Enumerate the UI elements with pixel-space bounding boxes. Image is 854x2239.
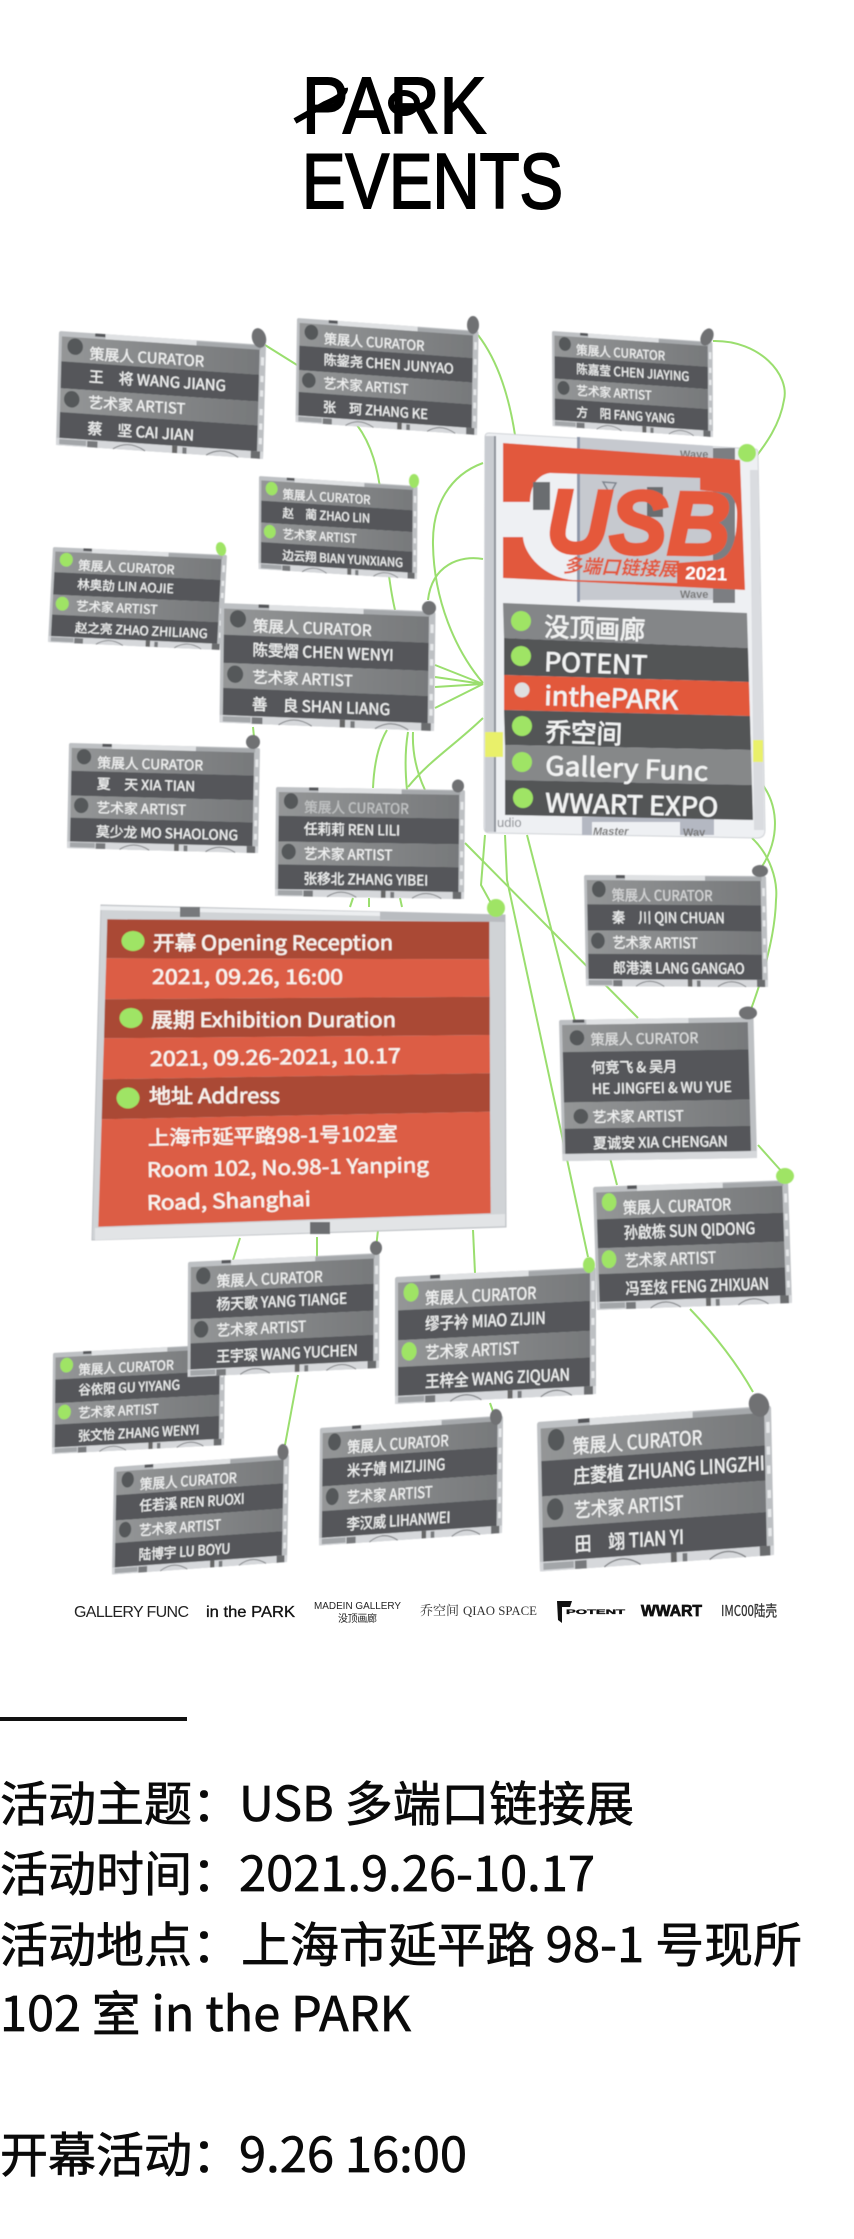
venue list [503,603,753,825]
panel: Zhao Lin / Bian Yunxiang [259,474,419,579]
artist block [73,796,239,844]
panel: Mizijing / Lihanwei [319,1409,503,1545]
curator block: 策展人 CURATOR [576,341,665,365]
opening reception: 开幕 Opening Reception [153,927,393,956]
panel: Chen Wenyi / Shan Liang [220,601,436,731]
curator block: 缪子衿 MIAO ZIJIN [425,1306,546,1335]
artist block [194,1313,358,1368]
address: Road, Shanghai [146,1183,311,1216]
curator block [284,793,409,841]
panel: Gu Yiyang / Zhang Wenyi [52,1344,225,1454]
panel: USB exhibition main panel [484,433,765,839]
artist block: 艺术家 ARTIST [624,1245,716,1272]
connector lines [233,335,785,1445]
divider rule [0,1717,187,1721]
artist block [63,390,195,446]
curator block [66,338,227,396]
panel: USB exhibition main panel: Wave [680,449,708,461]
artist block: 王梓全 WANG ZIQUAN [425,1362,570,1393]
logo: in the PARK: in the PARK [206,1604,295,1621]
year: 2021 [685,563,728,584]
curator block: 任若溪 REN RUOXI [139,1487,245,1515]
address: Room 102, No.98-1 Yanping [147,1149,429,1183]
handle [738,444,756,462]
artist block: 艺术家 ARTIST [576,381,652,404]
artist block [54,596,209,642]
logo: Potent: POTENT [566,1610,626,1616]
artist block [325,1479,451,1537]
logo: WWART: WWART [641,1603,702,1620]
curator block: 策展人 CURATOR [324,328,425,355]
handle [776,1168,794,1184]
line: time: 2021.9.26-10.17 [239,1835,595,1905]
USB wordmark: USB [546,472,731,575]
line: location: 上海市延平路 98-1 号现所 [241,1906,802,1976]
curator block: 秦 川 QIN CHUAN [612,906,725,927]
curator block [196,1261,347,1316]
artist block: 张 珂 ZHANG KE [323,396,428,423]
logo: IMCOO: IMC00陆壳 [721,1600,777,1621]
curator block: 策展人 CURATOR [78,556,175,578]
handle [250,327,268,349]
address [116,1080,429,1216]
artist block [302,371,428,423]
artist block: 夏诚安 XIA CHENGAN [593,1130,728,1154]
curator block [569,1026,732,1099]
artist block: 艺术家 ARTIST [216,1315,307,1341]
panel: USB exhibition main panel: Wave [680,589,708,601]
artist block: 艺术家 ARTIST [282,525,357,547]
artist block: 田 翊 TIAN YI [574,1522,684,1558]
logo: Qiao Space: QIAO SPACE [463,1603,537,1618]
panel: USB exhibition main panel: udio [497,815,522,830]
handle [467,316,479,334]
handle [739,1006,757,1020]
curator block: 策展人 CURATOR [283,485,371,508]
USB logo: red block with plug cutout [503,443,745,590]
handle [409,474,419,488]
handle [278,1444,288,1460]
subtitle: 多端口链接展 [563,551,680,582]
logo: Qiao Space: 乔空间 [420,1600,459,1619]
panel: Zhuang Lingzhi / Tian Yi [537,1390,774,1571]
panel: USB exhibition main panel: Wav [683,827,706,839]
artist block [547,1488,685,1560]
curator block [548,1414,765,1492]
curator block [229,610,394,666]
address: 地址 Address [149,1080,280,1109]
curator block [76,749,204,795]
title: EVENTS: EVENTS [302,137,563,225]
curator block: 策展人 CURATOR [611,884,713,905]
logo: Madein Gallery: MADEIN GALLERY [314,1601,401,1612]
curator block [404,1276,546,1336]
line: location [0,1906,802,1976]
line: time [0,1835,595,1905]
sponsor logos row [74,1600,777,1625]
curator block: 策展人 CURATOR [425,1281,536,1310]
handle [487,899,505,917]
title: PARK logo: PARK [302,61,486,150]
curator block: 王 将 WANG JIANG [89,366,226,396]
artist block: 艺术家 ARTIST [88,392,186,419]
curator block: 策展人 CURATOR [217,1265,323,1292]
venue: inthePARK: inthePARK [544,676,679,718]
venue: Potent: POTENT [544,642,648,683]
curator block: 陈雯熠 CHEN WENYI [252,638,394,666]
exhibition duration [120,1004,401,1072]
artist block [557,380,675,427]
curator block [121,1463,245,1517]
artist block [591,931,745,978]
panel: Yang Tiange / Wang Yuchen [188,1241,382,1377]
artist block: 艺术家 ARTIST [76,596,159,618]
panel: Qin Chuan / Lang Gangao [584,865,768,987]
artist block: 艺术家 ARTIST [612,931,698,952]
address: 上海市延平路98-1号102室 [148,1118,398,1151]
curator block: 策展人 CURATOR [253,614,372,641]
line: opening: 9.26 16:00 [239,2116,467,2186]
artist block: 艺术家 ARTIST [347,1480,433,1508]
artist block: 张文怡 ZHANG WENYI [78,1419,199,1445]
curator block: 米子婧 MIZIJING [347,1452,445,1482]
logo: Gallery Func: GALLERY FUNC [74,1604,189,1621]
curator block [60,1352,180,1400]
artist block: 善 良 SHAN LIANG [252,693,390,720]
panel: exhibition information [92,899,506,1240]
curator block: 策展人 CURATOR [97,752,204,774]
artist block: 边云翔 BIAN YUNXIANG [282,546,403,571]
artist block: 莫少龙 MO SHAOLONG [96,820,238,844]
line: theme: 活动主题： [0,1765,240,1835]
curator block [58,553,175,597]
panel: He Jingfei & Wu Yue / Xia Chengan [559,1006,757,1161]
venue: Madein Gallery: 没顶画廊 [544,607,646,648]
artist block: 李汉威 LIHANWEI [347,1505,451,1535]
artist block [573,1104,728,1154]
curator block: 谷依阳 GU YIYANG [78,1374,180,1399]
curator block: 赵 蔺 ZHAO LIN [283,504,370,527]
logo: Madein Gallery: 没顶画廊 [338,1610,377,1625]
panel: Lin Aojie / Zhao Zhiliang [48,541,228,650]
exhibition duration: 2021, 09.26-2021, 10.17 [150,1040,401,1072]
curator block: 任莉莉 REN LILI [304,819,400,841]
handle [452,780,464,792]
opening reception: 2021, 09.26, 16:00 [152,961,343,990]
handle [745,1390,773,1420]
opening reception [122,927,393,990]
artist block: 艺术家 ARTIST [252,665,353,691]
curator block: 策展人 CURATOR [304,797,409,819]
curator block: 夏 天 XIA TIAN [97,773,195,795]
handle [752,865,768,877]
curator block: 策展人 CURATOR [572,1423,703,1460]
logo: Potent [557,1601,626,1623]
artist block [601,1243,769,1301]
venue: Gallery Func: Gallery Func [545,746,709,789]
line: opening [0,2116,467,2186]
curator block: 孙啟栋 SUN QIDONG [623,1216,756,1244]
artist block: 方 阳 FANG YANG [576,403,675,427]
artist block: 艺术家 ARTIST [304,843,392,865]
exhibition duration: 展期 Exhibition Duration [151,1004,396,1033]
event details text [0,1765,802,2186]
handle [490,1409,502,1425]
artist block [264,524,403,571]
curator block [304,324,454,378]
artist block: 艺术家 ARTIST [139,1513,221,1540]
curator block: 策展人 CURATOR [140,1466,237,1494]
curator block: 林奥劼 LIN AOJIE [77,575,174,597]
artist block [118,1512,231,1566]
logo: Qiao Space [420,1600,537,1619]
curator block: HE JINGFEI & WU YUE [592,1076,732,1099]
panel: Ren Lili / Zhang Yibei [275,780,465,899]
panel: Chen Junyao / Zhang Ke [296,316,479,435]
panel: Chen Jiaying / Fang Yang [552,326,716,437]
artist block: 艺术家 ARTIST [425,1336,519,1364]
line: location continued: 102 室 in the PARK [0,1975,411,2045]
panel: Miao Zijin / Wang Ziquan [395,1257,596,1404]
curator block: 杨天歌 YANG TIANGE [216,1287,347,1315]
curator block: 策展人 CURATOR [347,1429,449,1458]
curator block [266,481,371,527]
artist block: 艺术家 ARTIST [323,373,409,398]
curator block: 陈鋆尧 CHEN JUNYAO [324,349,454,378]
panel: Wang Jiang / Cai Jian [56,327,268,459]
curator block [559,337,689,385]
handle [214,541,228,557]
curator block: 陈嘉莹 CHEN JIAYING [576,360,689,385]
line: time: 活动时间： [0,1835,240,1905]
artist block: 张移北 ZHANG YIBEI [303,868,428,891]
artist block: 王宇琛 WANG YUCHEN [216,1339,358,1367]
curator block: 庄菱植 ZHUANG LINGZHI [573,1448,765,1490]
handle [422,601,436,615]
panel: USB exhibition main panel: Master [593,826,629,838]
artist block [402,1333,570,1394]
artist block: 郎港澳 LANG GANGAO [613,956,745,978]
artist block [227,664,391,720]
curator block: 策展人 CURATOR [89,343,205,372]
panel: Ren Ruoxi / Lu Boyu [112,1444,289,1574]
venue: Qiao Space: 乔空间 [545,712,623,752]
artist block: 艺术家 ARTIST [78,1398,159,1422]
curator block [328,1426,449,1483]
curator block: 策展人 CURATOR [623,1192,732,1219]
panel: Xia Tian / Mo Shaolong [67,735,260,853]
line: opening: 开幕活动： [0,2116,240,2186]
panel: Sun Qidong / Feng Zhixuan [593,1168,794,1310]
handle [246,735,260,749]
artist block: 艺术家 ARTIST [592,1105,684,1127]
curator block: 何竞飞 & 吴月 [591,1055,677,1078]
curator block: 策展人 CURATOR [590,1027,699,1050]
curator block [602,1188,756,1245]
line: theme: USB 多端口链接展 [239,1765,634,1835]
line: theme [0,1765,634,1835]
curator block [592,881,725,927]
artist block [281,843,428,891]
handle [583,1257,595,1273]
artist block: 冯至炫 FENG ZHIXUAN [625,1271,769,1300]
venue: Qiao Space [512,712,623,752]
artist block: 艺术家 ARTIST [96,797,186,819]
artist block: 陆博宇 LU BOYU [138,1536,231,1564]
venue: WWART EXPO: WWART EXPO [545,783,719,825]
handle [698,326,716,348]
artist block [58,1396,200,1446]
artist block: 蔡 坚 CAI JIAN [87,418,194,446]
artist block: 艺术家 ARTIST [574,1488,684,1524]
handle [370,1241,382,1255]
line: location: 活动地点： [0,1906,240,1976]
artist block: 赵之亮 ZHAO ZHILIANG [75,618,208,642]
logo: Madein Gallery [314,1601,401,1625]
curator block: 策展人 CURATOR [79,1354,174,1379]
